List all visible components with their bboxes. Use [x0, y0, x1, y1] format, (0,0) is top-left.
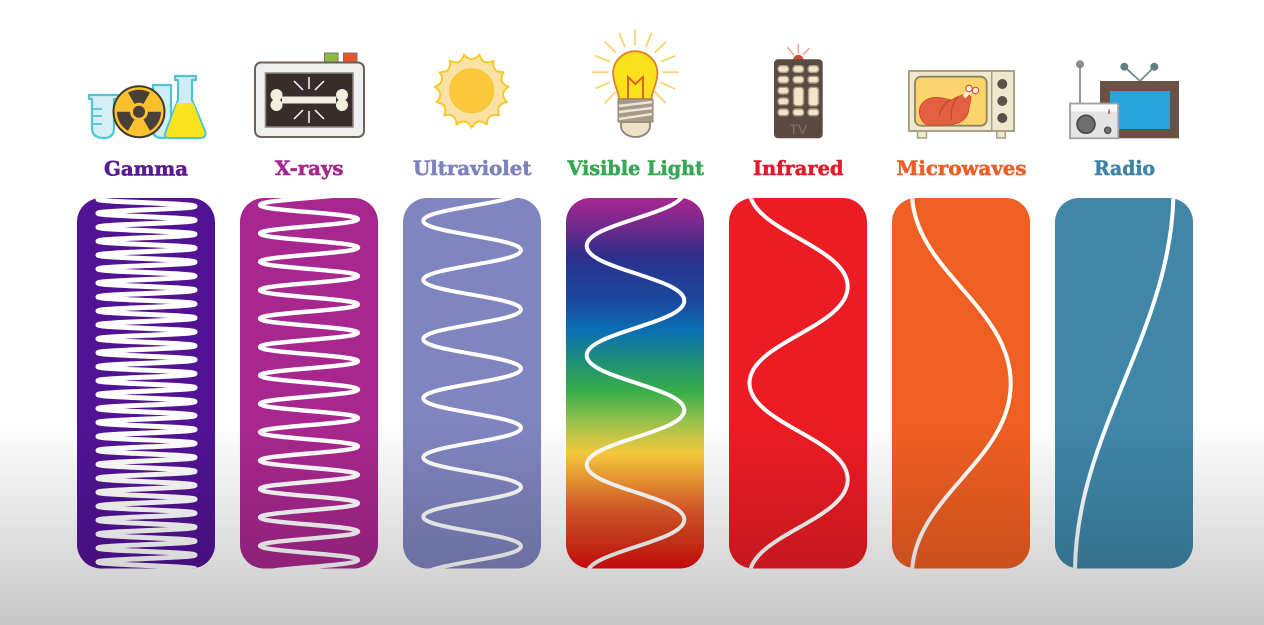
- panel: x-rays wave: [240, 191, 378, 574]
- icon: TV remote: TV: [789, 121, 808, 137]
- heading: Microwaves: Microwaves: [896, 156, 1026, 180]
- panel: gamma wave: [77, 198, 215, 569]
- heading: Infrared: Infrared: [753, 156, 844, 180]
- bottom shadow gradient: [0, 422, 1264, 625]
- panel: microwaves wave: [892, 192, 1030, 575]
- icon: TV remote: [774, 44, 823, 138]
- heading: Radio: Radio: [1094, 156, 1155, 180]
- heading: X-rays: X-rays: [275, 156, 344, 180]
- icon: light bulb: [592, 29, 679, 137]
- panel: infrared wave: [729, 190, 867, 576]
- icon: radio and television: [1070, 60, 1179, 138]
- icon: sun: [435, 55, 508, 128]
- panel: radio wave: [1055, 190, 1193, 572]
- heading: Gamma: Gamma: [104, 156, 188, 180]
- heading: Ultraviolet: Ultraviolet: [413, 156, 532, 180]
- icon: gamma lab flasks with radiation symbol: [89, 76, 205, 138]
- icon: microwave with roast chicken: [909, 71, 1014, 138]
- heading: Visible Light: Visible Light: [567, 156, 705, 180]
- panel: ultraviolet wave: [403, 191, 541, 576]
- panel: visible light wave: [566, 191, 704, 574]
- icon: x-ray machine with bone: [255, 53, 364, 137]
